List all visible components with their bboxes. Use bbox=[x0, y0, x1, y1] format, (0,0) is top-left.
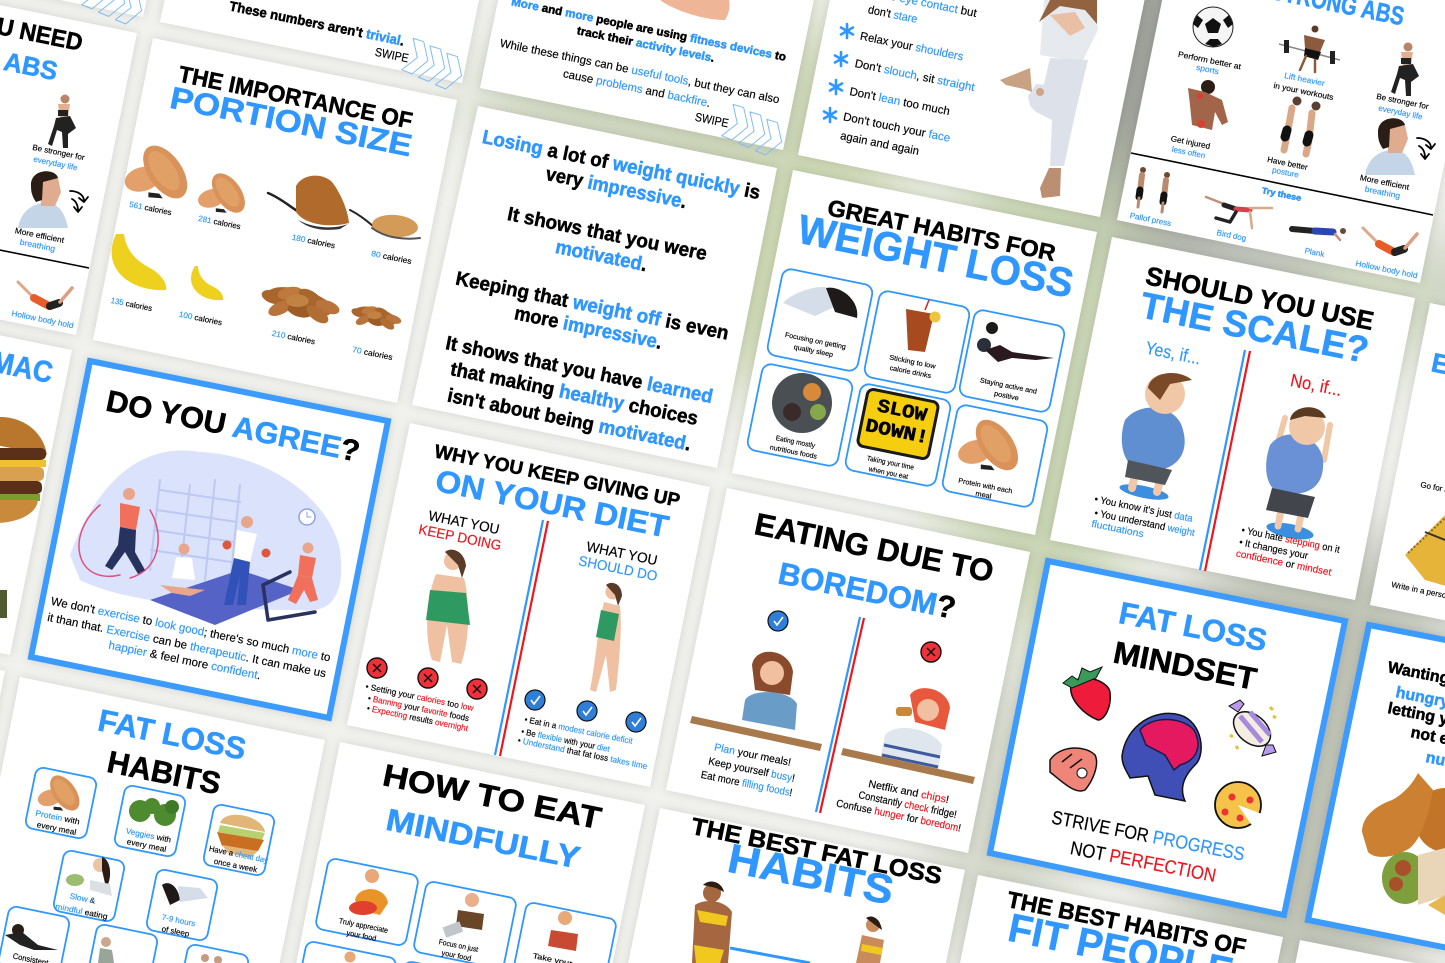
illustration: overweight man on scale bbox=[1118, 373, 1192, 503]
divider bbox=[816, 617, 864, 813]
bullet list: keep doing: • Setting your calories too low bbox=[365, 681, 475, 713]
text fragments bbox=[1386, 659, 1445, 770]
bullet list: should do bbox=[517, 714, 649, 771]
heading: on your diet: ON YOUR DIET bbox=[432, 463, 672, 544]
caption: posture: Have better bbox=[1267, 155, 1309, 172]
heading: fat loss: FAT LOSS bbox=[95, 703, 249, 767]
clock bbox=[299, 509, 315, 525]
caption: get injured bbox=[1170, 134, 1211, 160]
illustration: people exercising bbox=[70, 450, 341, 625]
card: big mac bbox=[0, 288, 72, 655]
figure: woman in bikini right bbox=[856, 916, 884, 963]
label: should do: WHAT YOU bbox=[585, 538, 659, 568]
heading: fat loss: FAT LOSS bbox=[1116, 595, 1270, 658]
figure: woman in bikini left bbox=[692, 881, 732, 963]
food: almonds bbox=[260, 281, 402, 332]
photo: woman in white bbox=[1000, 0, 1098, 198]
tips list: Don't lean too much bbox=[848, 86, 951, 118]
tile: sleep: of sleep bbox=[161, 924, 191, 939]
heading: portion size: PORTION SIZE bbox=[167, 80, 415, 163]
label: keep doing: WHAT YOU bbox=[427, 507, 501, 537]
divider bbox=[1200, 350, 1250, 571]
text block bbox=[499, 0, 787, 110]
card: top-left swipe slide bbox=[0, 0, 205, 26]
illustration: woman planning meals bbox=[690, 652, 822, 751]
slogan: NOT PERFECTION bbox=[1068, 838, 1218, 887]
exercise labels: Bird dog bbox=[1216, 228, 1247, 243]
text: netflix: Constantly check fridge! bbox=[857, 789, 958, 821]
heading: habits: HABITS bbox=[724, 835, 898, 914]
text block: more impressive. bbox=[513, 302, 664, 354]
habit tile: protein: meal bbox=[975, 491, 992, 501]
tips list: Don't slouch, sit straight bbox=[854, 58, 976, 94]
icon: swipe chevrons bbox=[400, 37, 467, 91]
heading: eating due to: EATING DUE TO bbox=[752, 506, 997, 589]
figures: hollow body hold bbox=[1363, 228, 1417, 252]
card: eating due to boredom bbox=[666, 488, 1030, 853]
card: left edge sliver bbox=[0, 610, 5, 963]
figure: breathing man bbox=[1365, 118, 1415, 175]
illustration: stressed man on scale bbox=[1265, 407, 1330, 543]
tile: slow mindful eating bbox=[52, 849, 126, 923]
tile: lower middle bbox=[391, 961, 495, 963]
bullet list: yes: • You know it's just data bbox=[1093, 494, 1194, 525]
card: numbers slide bbox=[160, 0, 524, 91]
tile: slow mindful eating: Slow & bbox=[69, 892, 97, 906]
label: keep doing bbox=[417, 507, 503, 553]
card: losing weight quickly bbox=[412, 106, 777, 468]
exercise labels: Hollow body hold bbox=[1355, 259, 1418, 280]
heading: should you use: SHOULD YOU USE bbox=[1143, 260, 1376, 336]
label: should do: SHOULD DO bbox=[577, 552, 659, 584]
heading: best fat loss: THE BEST FAT LOSS bbox=[689, 813, 944, 890]
caption: breathing: breathing bbox=[1364, 185, 1401, 201]
text: plan: Keep yourself busy! bbox=[707, 755, 796, 785]
card: why you need strong abs bbox=[1117, 0, 1445, 283]
tips list: Relax your shoulders bbox=[859, 31, 964, 63]
text block: It shows that you were bbox=[506, 203, 709, 265]
card: fat loss mindset bbox=[990, 561, 1345, 915]
tile: lower left bbox=[293, 941, 397, 963]
figure: squat bbox=[1391, 42, 1419, 96]
tile: cheat day: Have a cheat day bbox=[208, 844, 269, 865]
tips list: don't stare bbox=[867, 4, 918, 26]
bullet list: yes: • You understand weight bbox=[1093, 508, 1196, 539]
card: should you use the scale bbox=[1050, 237, 1415, 600]
text block: that making healthy choices bbox=[449, 358, 700, 430]
tile: cheat day bbox=[202, 803, 276, 877]
text block: motivated. bbox=[553, 236, 649, 276]
caption: be stronger: Be stronger for bbox=[1376, 92, 1430, 111]
habit tile: active: Staying active and bbox=[979, 377, 1038, 396]
card: the best fat loss habits bbox=[598, 808, 965, 963]
caption: be stronger: Be stronger for bbox=[32, 143, 86, 162]
text: netflix: Confuse hunger for boredom! bbox=[835, 798, 962, 835]
label: yes: Yes, if... bbox=[1144, 338, 1203, 369]
heading: mindset: MINDSET bbox=[1110, 635, 1260, 697]
habit tile: sleep: quality sleep bbox=[793, 344, 834, 359]
tile: focus bbox=[413, 881, 517, 963]
heading: how to eat: HOW TO EAT bbox=[380, 757, 604, 836]
caption: be stronger bbox=[32, 143, 86, 173]
habit tile: low calorie drinks: calorie drinks bbox=[889, 365, 932, 380]
calorie labels: 210 calories bbox=[271, 329, 316, 346]
habit tile: slow down: DOWN! bbox=[863, 415, 931, 449]
bullet list: no: • You hate stepping on it bbox=[1240, 525, 1341, 556]
bullet list: no bbox=[1235, 525, 1341, 579]
bullet list: yes bbox=[1090, 494, 1196, 540]
card: wanting to eat when hungry bbox=[1308, 625, 1445, 963]
habit tile: protein bbox=[941, 404, 1049, 508]
text block bbox=[444, 126, 762, 456]
tips list: Don't touch your face bbox=[842, 111, 951, 145]
swipe label: SWIPE bbox=[694, 110, 730, 130]
text: plan: Eat more filling foods! bbox=[700, 769, 793, 799]
heading: habits: HABITS bbox=[104, 744, 224, 801]
heading: great habits: GREAT HABITS FOR bbox=[825, 194, 1058, 266]
bullet list: keep doing: • Expecting results overnight bbox=[366, 703, 470, 733]
food: burger bbox=[0, 417, 47, 523]
bullet list: keep doing bbox=[365, 681, 475, 733]
bullet list: no: confidence or mindset bbox=[1235, 548, 1332, 579]
caption: more efficient: More efficient bbox=[14, 226, 66, 245]
caption: sports: sports bbox=[1195, 63, 1220, 76]
icon: pizza bbox=[1215, 782, 1262, 828]
illustration: notebook bbox=[1405, 515, 1445, 590]
card: great habits for weight loss bbox=[732, 170, 1097, 535]
text: plan: Plan your meals! bbox=[713, 741, 792, 769]
tile: focus: Focus on just bbox=[438, 937, 480, 954]
habit tile: nutritious foods: Eating mostly bbox=[775, 435, 816, 450]
swipe label: SWIPE bbox=[374, 45, 410, 65]
card: why you keep giving up on your diet bbox=[347, 423, 710, 787]
heading: why you keep: WHY YOU KEEP GIVING UP bbox=[433, 441, 682, 512]
tips list: again and again bbox=[839, 130, 920, 158]
heading: boredom: BOREDOM? bbox=[775, 556, 959, 626]
food: bananas bbox=[112, 234, 223, 300]
divider bbox=[495, 520, 548, 756]
food: peanut butter spoons bbox=[268, 176, 420, 239]
treadmill person bbox=[263, 542, 318, 620]
heading: importance: THE IMPORTANCE OF bbox=[176, 61, 415, 134]
caption: get injured: Get injured bbox=[1170, 134, 1211, 151]
caption: sports: Perform better at bbox=[1177, 50, 1243, 72]
tile: protein: Protein with bbox=[35, 809, 80, 826]
text: plan bbox=[700, 741, 796, 799]
calorie labels bbox=[110, 200, 412, 362]
tile: sleep: 7-9 hours bbox=[161, 913, 196, 928]
tile: appreciate bbox=[315, 858, 419, 946]
icon: cross bbox=[921, 642, 941, 662]
habit tile: active bbox=[958, 309, 1066, 413]
text: netflix: Netflix and chips! bbox=[867, 778, 950, 806]
habit tile: slow down bbox=[844, 383, 952, 487]
figure: slimmer woman bbox=[590, 583, 622, 692]
text block: It shows that you have learned bbox=[444, 332, 715, 408]
habit tile: nutritious foods bbox=[746, 363, 854, 467]
habit tile: active: positive bbox=[993, 391, 1019, 402]
tile: consistent exercise bbox=[0, 905, 71, 963]
tile: mental health bbox=[85, 923, 159, 963]
habit tile: slow down: SLOW bbox=[875, 395, 929, 427]
figures: bird dog bbox=[1206, 197, 1272, 228]
tile: focus: your food bbox=[441, 948, 472, 963]
card: why you need strong abs left copy bbox=[0, 0, 137, 335]
card: the best habits of fit people bbox=[916, 875, 1283, 963]
jump rope person bbox=[79, 488, 158, 578]
caption: be stronger: everyday life bbox=[1378, 104, 1424, 122]
tile: social bbox=[176, 943, 250, 963]
icon: swipe chevrons bbox=[720, 103, 787, 157]
heading: do you agree: DO YOU AGREE? bbox=[103, 385, 363, 469]
figures: plank bbox=[1292, 228, 1346, 240]
calorie labels: 80 calories bbox=[371, 249, 412, 266]
habit tile: low calorie drinks bbox=[863, 290, 971, 394]
calorie labels: 561 calories bbox=[129, 200, 172, 217]
body text: happier & feel more confident. bbox=[107, 640, 262, 682]
habit tile: slow down: Taking your time bbox=[866, 455, 915, 472]
decoration: dark food sliver bbox=[0, 590, 7, 618]
calorie labels: 180 calories bbox=[291, 233, 336, 250]
caption: get injured: less often bbox=[1171, 145, 1206, 160]
exercise labels bbox=[1129, 211, 1418, 280]
tile: appreciate: your food bbox=[346, 928, 377, 943]
habit tile: sleep: Focusing on getting bbox=[784, 332, 846, 351]
icon: check bbox=[768, 611, 788, 631]
heading: the scale: THE SCALE? bbox=[1137, 285, 1372, 371]
icon: steak bbox=[1050, 748, 1097, 791]
tile: protein bbox=[24, 766, 98, 840]
habit tile: slow down: when you eat bbox=[867, 466, 909, 481]
icons: red crosses bbox=[367, 658, 487, 699]
heading: best habits: THE BEST HABITS OF bbox=[1005, 886, 1248, 960]
text block: cause problems and backfire. bbox=[562, 68, 711, 110]
bar fragment bbox=[730, 948, 810, 963]
caption: these numbers: These numbers aren't trivial. bbox=[228, 0, 406, 49]
caption: lift heavier bbox=[1273, 71, 1334, 102]
card: do you agree bbox=[31, 361, 388, 718]
card: fat loss habits bbox=[0, 677, 325, 963]
icon: brain head bbox=[1122, 713, 1201, 801]
figure: sore back bbox=[1188, 80, 1228, 130]
icon: strawberry bbox=[1063, 667, 1110, 720]
text block: track their activity levels. bbox=[576, 25, 715, 65]
card: the importance of portion size bbox=[93, 38, 457, 403]
icons: blue asterisks bbox=[824, 24, 853, 122]
habit tile: sleep bbox=[766, 268, 874, 372]
caption: lift heavier: in your workouts bbox=[1273, 81, 1334, 102]
figure: hollow body hold bbox=[18, 282, 72, 306]
card: more and more fitness devices bbox=[480, 0, 845, 157]
card: body language tips bbox=[798, 0, 1162, 217]
calorie labels: 281 calories bbox=[198, 214, 241, 231]
icon: breathing arrows bbox=[70, 191, 88, 212]
caption: hollow body hold: Hollow body hold bbox=[11, 309, 74, 330]
exercise labels: Plank bbox=[1304, 246, 1326, 259]
figure: breathing man bbox=[18, 171, 68, 228]
card: right edge journal slide bbox=[1370, 303, 1445, 667]
card: how to eat mindfully bbox=[280, 742, 645, 963]
heading: abs: ABS bbox=[1, 46, 60, 86]
food: chicken portions bbox=[122, 138, 252, 219]
label: should do bbox=[577, 538, 659, 584]
figure: lifter bbox=[1279, 26, 1340, 72]
tile: appreciate: Truly appreciate bbox=[338, 916, 389, 935]
caption: posture: posture bbox=[1271, 165, 1300, 180]
food: fried chicken and wrap bbox=[1362, 773, 1445, 915]
illustration: woman snacking bbox=[841, 688, 975, 784]
body text: it than that. Exercise can be therapeutic. It can make us bbox=[46, 612, 327, 680]
icon: soccer ball bbox=[1193, 7, 1233, 47]
caption: breathing bbox=[1359, 173, 1411, 201]
bullet list: yes: fluctuations bbox=[1090, 519, 1145, 540]
caption: posture bbox=[1267, 155, 1309, 180]
tile: veggies: Veggies with bbox=[125, 827, 172, 845]
subheading: try these: Try these bbox=[1261, 185, 1302, 203]
text block: very impressive. bbox=[544, 163, 688, 213]
tile: sleep bbox=[145, 868, 219, 942]
heading: mindfully: MINDFULLY bbox=[383, 802, 583, 876]
bullet list: keep doing: • Banning your favorite foods bbox=[367, 693, 470, 723]
text block: Losing a lot of weight quickly is bbox=[480, 126, 762, 204]
caption: breathing: More efficient bbox=[1359, 173, 1411, 192]
icon: swipe chevrons bbox=[80, 0, 147, 26]
caption: lift heavier: Lift heavier bbox=[1284, 71, 1326, 88]
figure: posture men bbox=[1284, 96, 1320, 154]
figure: squat bbox=[48, 94, 76, 148]
icon: breathing arrows bbox=[1417, 138, 1435, 159]
bullet list: should do: • Be flexible with your diet bbox=[521, 726, 611, 754]
figures: pallof press bbox=[1138, 167, 1170, 212]
text block: While these things can be useful tools, but they can also bbox=[499, 38, 780, 106]
label: keep doing: KEEP DOING bbox=[417, 521, 503, 553]
tile: veggies: every meal bbox=[126, 837, 167, 854]
habit tile: nutritious foods: nutritious foods bbox=[769, 444, 818, 461]
photo: hand bbox=[660, 0, 730, 20]
text block: isn't about being motivated. bbox=[445, 385, 693, 456]
caption: more efficient bbox=[14, 226, 66, 254]
calorie labels: 135 calories bbox=[110, 296, 153, 313]
caption: more efficient: breathing bbox=[19, 238, 56, 254]
tile: cheat day: once a week bbox=[213, 857, 259, 875]
tile: slow mindful eating: mindful eating bbox=[55, 902, 108, 921]
dumbbell person bbox=[222, 516, 270, 605]
exercise labels: Pallof press bbox=[1129, 211, 1172, 228]
text: netflix bbox=[835, 778, 962, 835]
heading: weight loss: WEIGHT LOSS bbox=[794, 206, 1078, 307]
caption: be stronger bbox=[1376, 92, 1430, 122]
habit tile: low calorie drinks: Sticking to low bbox=[889, 354, 937, 371]
slogan: STRIVE FOR PROGRESS bbox=[1050, 808, 1246, 866]
habit tile: protein: Protein with each bbox=[958, 478, 1013, 495]
tile: take your time bbox=[513, 902, 617, 963]
bullet list: no: • It changes your bbox=[1238, 537, 1310, 562]
icon: candy bbox=[1227, 700, 1277, 756]
seated person bbox=[160, 544, 205, 596]
calorie labels: 100 calories bbox=[178, 310, 223, 327]
figure: larger woman bbox=[426, 550, 470, 664]
body text: We don't exercise to look good; there's so much more to bbox=[50, 596, 331, 664]
icons: blue checks bbox=[525, 690, 646, 732]
caption: be stronger: everyday life bbox=[33, 155, 79, 173]
label: no: No, if... bbox=[1289, 370, 1344, 400]
text block: Keeping that weight off is even bbox=[454, 268, 731, 345]
tips list bbox=[839, 0, 978, 158]
tile: protein: every meal bbox=[36, 820, 77, 837]
bullet list: should do: • Eat in a modest calorie deficit bbox=[524, 714, 634, 746]
calorie labels: 70 calories bbox=[352, 345, 393, 362]
card: bottom-right slide bbox=[1240, 940, 1445, 963]
tile: veggies bbox=[113, 784, 187, 858]
bullet list: should do: • Understand that fat loss takes time bbox=[517, 735, 649, 771]
